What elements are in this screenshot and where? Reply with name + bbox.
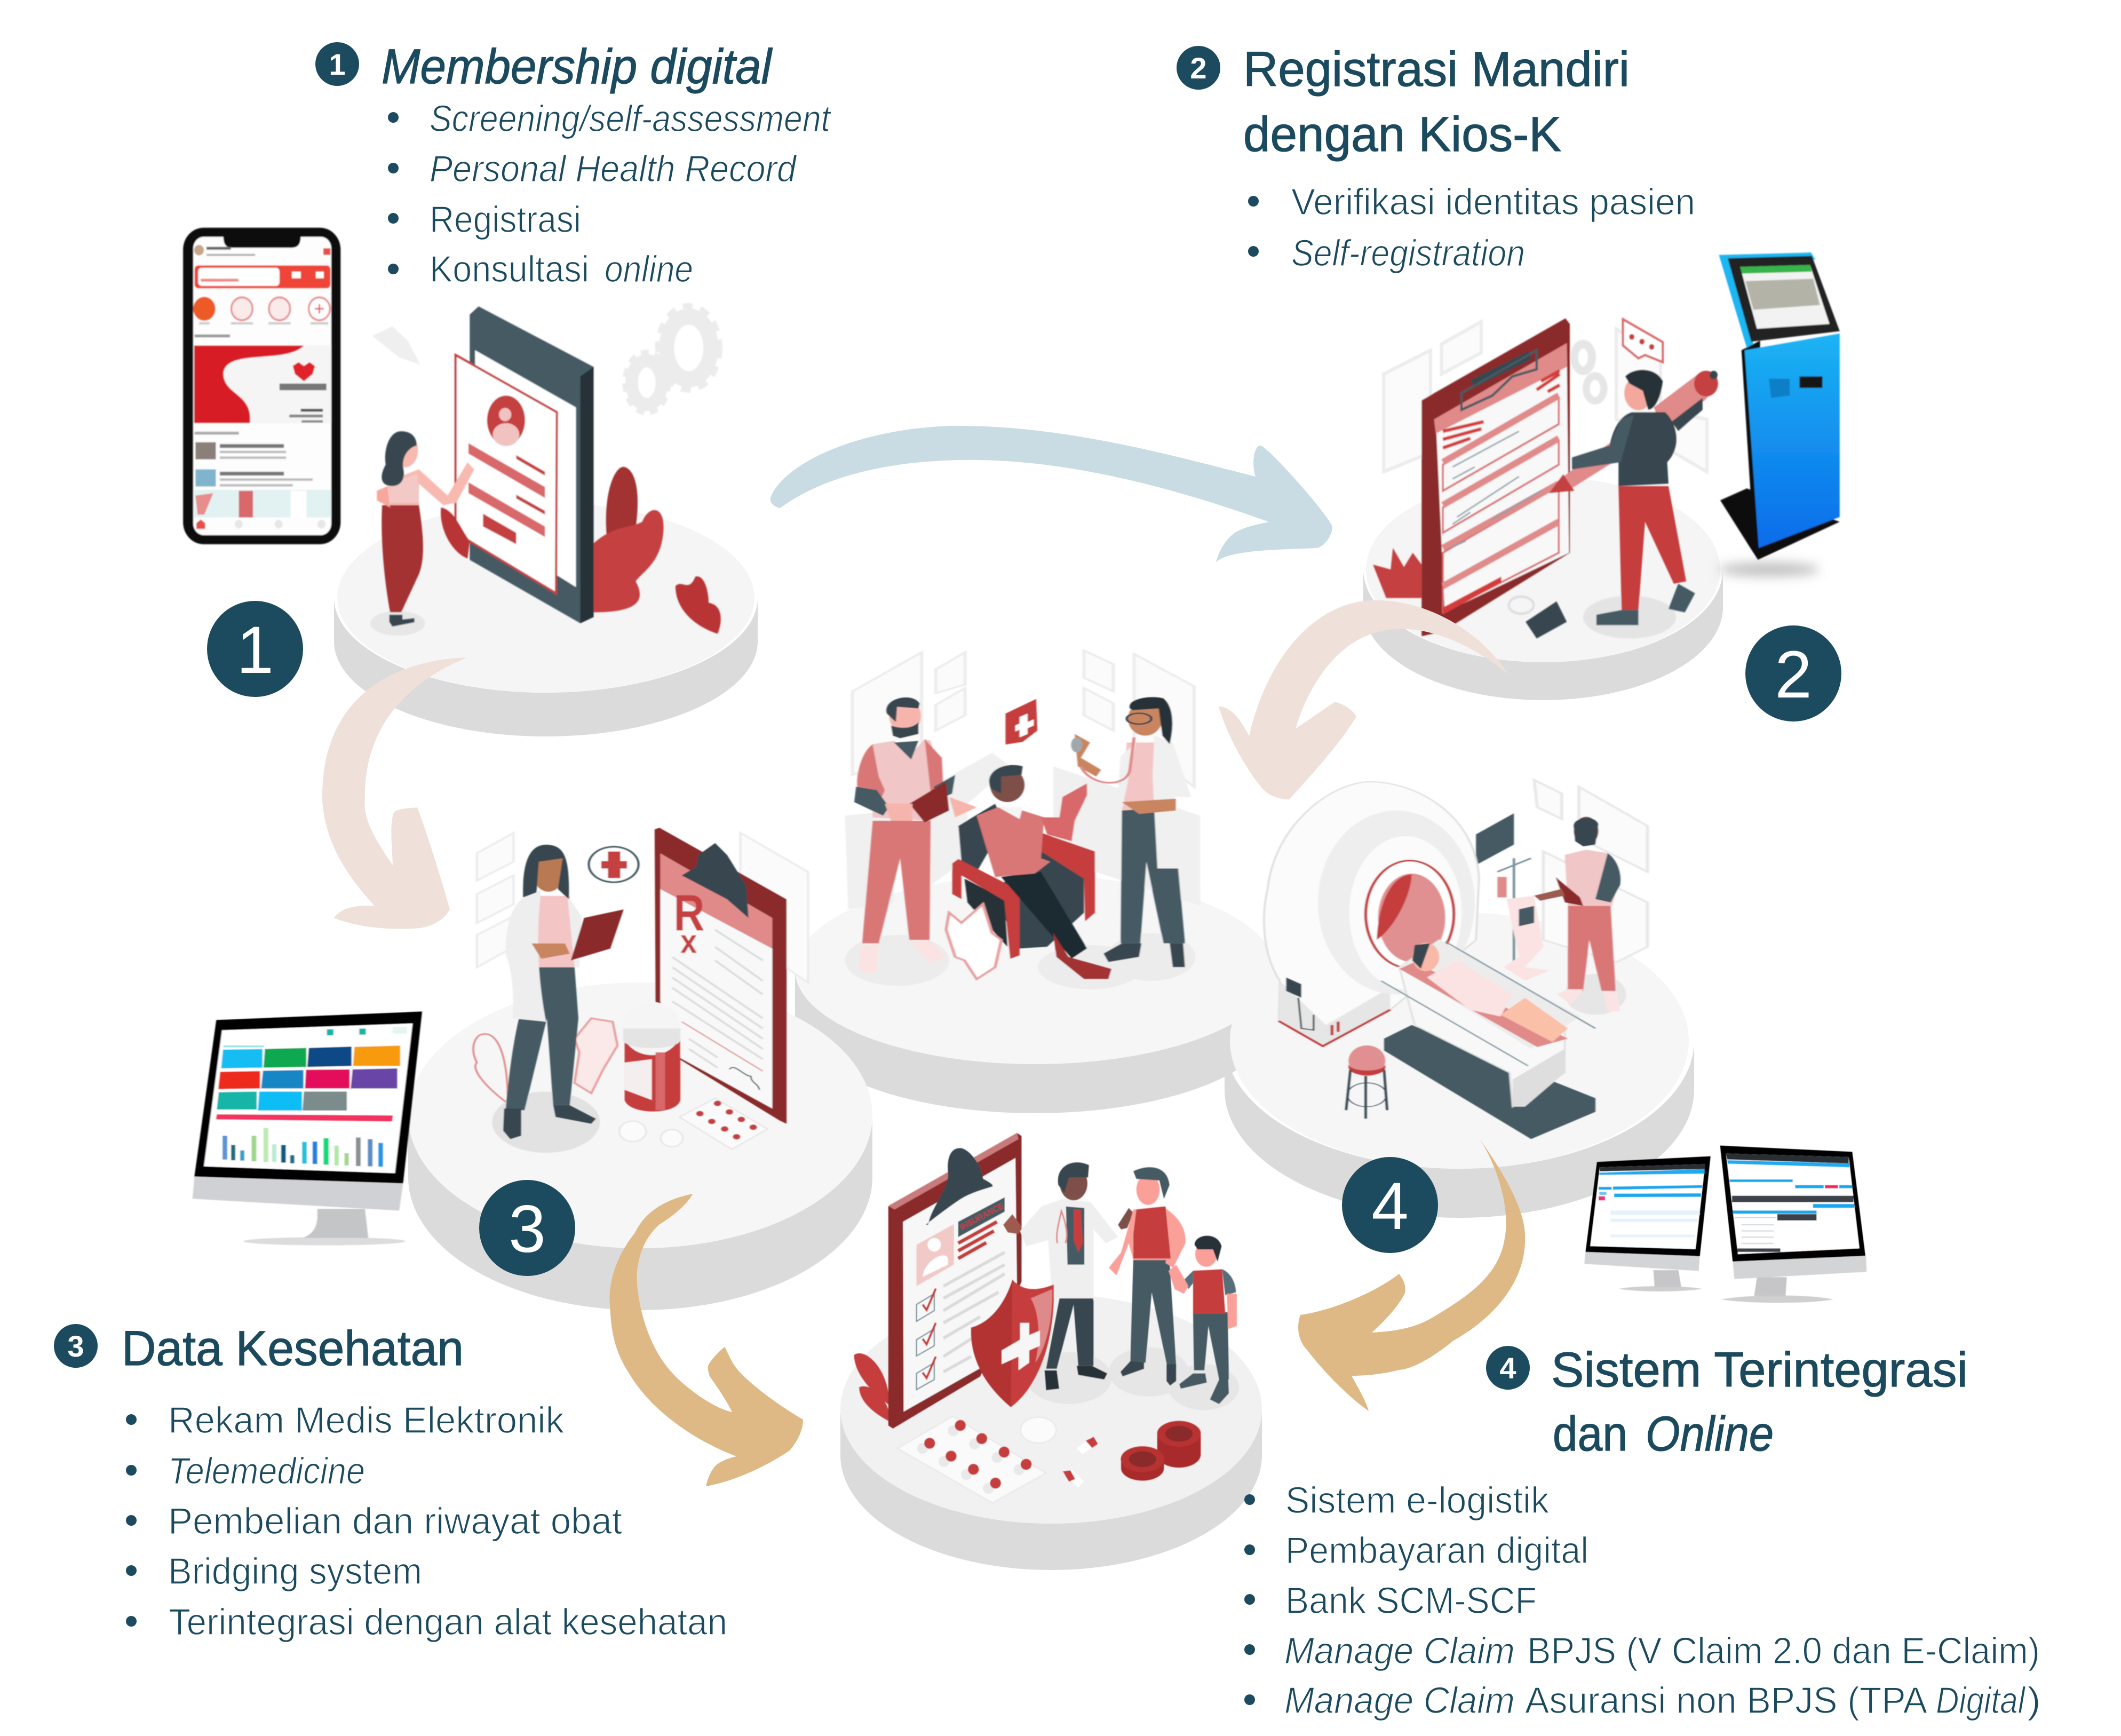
icon: tall leaf	[606, 467, 638, 538]
right monitor	[1720, 1146, 1866, 1303]
background frames	[1534, 780, 1648, 962]
bed table	[1381, 940, 1595, 1107]
icon: red plant	[854, 1353, 892, 1422]
illustration 3: doctor with prescription	[473, 828, 808, 1153]
person: doctor	[492, 845, 600, 1153]
illustration 2: man with giant form and pencil	[1373, 252, 1840, 638]
platform: disk 2	[1363, 477, 1723, 700]
menu icons	[193, 297, 330, 337]
icon: shield	[971, 1279, 1054, 1407]
list 4: Manage Claim	[1284, 1679, 1515, 1721]
title badge 2	[1177, 46, 1220, 90]
arrow: step 3 to bottom	[610, 1194, 803, 1486]
platform: center disk	[795, 875, 1275, 1113]
platform: disk 6	[840, 1294, 1262, 1570]
phone screen	[193, 237, 331, 535]
icon: clipboard in hand	[571, 909, 624, 961]
icon: profile card	[456, 355, 557, 593]
arrow: step 1 to 3	[322, 657, 467, 929]
icon: small plant	[441, 508, 470, 558]
title 3: Data Kesehatan	[122, 1321, 464, 1376]
list 3: Telemedicine	[168, 1450, 365, 1492]
floor shadows	[1026, 1347, 1239, 1410]
title 2: Registrasi Mandiri	[1243, 42, 1630, 97]
person: doctor with stethoscope	[1071, 697, 1191, 967]
icon: prescription clipboard: R	[674, 884, 705, 941]
title 1: Membership digital	[382, 39, 773, 94]
list 4	[1244, 1479, 2041, 1721]
person: mother	[1109, 1167, 1186, 1386]
phone body	[183, 228, 340, 544]
bed base	[1384, 1025, 1595, 1139]
list 4: Pembayaran digital	[1285, 1529, 1588, 1571]
list 4: Asuransi non BPJS (TPA	[1525, 1679, 1927, 1721]
icon: prescription clipboard: x	[680, 923, 697, 960]
icon: speech bubble	[1623, 319, 1663, 362]
title 4: Online	[1646, 1407, 1774, 1461]
person: nurse	[854, 697, 976, 974]
list 2	[1248, 181, 1695, 274]
kiosk	[1718, 252, 1840, 576]
background documents	[477, 833, 808, 982]
arrow: step 2 to center	[1219, 600, 1508, 799]
platform: disk 1	[334, 503, 758, 736]
number badge 4	[1342, 1157, 1438, 1253]
bottom banner	[194, 490, 331, 518]
dashboard bar chart	[223, 1128, 383, 1167]
icon: plant	[1373, 548, 1421, 598]
text block 4: Sistem Terintegrasi	[1244, 1343, 2041, 1721]
icon: small leaf	[676, 576, 721, 634]
monitor frame	[194, 1011, 422, 1184]
icon: binder clip	[1509, 597, 1567, 638]
icon: pills	[619, 1121, 683, 1147]
title badge 3	[54, 1324, 98, 1368]
number badge 1: 1	[236, 613, 274, 687]
title badge 4	[1486, 1346, 1530, 1390]
monitor: dashboard	[193, 1011, 422, 1246]
monitor base	[243, 1209, 406, 1246]
icon: star of life	[575, 1018, 617, 1093]
person: male nurse	[1534, 817, 1626, 1015]
monitors: hospital information system	[1584, 1146, 1866, 1303]
list 1: online	[605, 248, 693, 290]
title 4	[1551, 1343, 1968, 1461]
icon: gears	[625, 306, 720, 413]
monitor screen	[204, 1024, 412, 1173]
list 4: )	[2027, 1679, 2041, 1721]
list 1: Registrasi	[430, 199, 581, 240]
arrow: step 1 to 2	[770, 426, 1332, 562]
title badge 1: 1	[329, 47, 346, 81]
illustration 6: doctor and family with insurance	[854, 1133, 1239, 1503]
title badge 1	[315, 42, 359, 86]
title 4: dan	[1553, 1407, 1627, 1461]
illustration 5: consultation scene	[845, 651, 1201, 989]
icon: medicine bottle	[622, 1002, 681, 1112]
nav bar	[196, 519, 325, 529]
list 3: Terintegrasi dengan alat kesehatan	[169, 1601, 727, 1643]
icon: coins	[1121, 1421, 1201, 1480]
notch	[224, 236, 301, 248]
icon: giant clipboard form	[1421, 318, 1570, 636]
header row	[194, 245, 330, 256]
icon: phone device	[470, 306, 594, 623]
news list	[195, 432, 313, 487]
list 1: Konsultasi	[430, 248, 589, 290]
list 1: Screening/self-assessment	[430, 98, 831, 139]
phone mockup: member app screenshot	[183, 228, 340, 544]
icon: blister pack	[897, 1416, 1046, 1503]
icon: outline plant	[473, 1034, 508, 1104]
icon: blister pack	[679, 1098, 767, 1150]
text block 2: Registrasi Mandiri	[1177, 42, 1695, 274]
icon: clipboard: INSURANCE	[958, 1201, 1006, 1232]
text block 3: Data Kesehatan	[54, 1321, 727, 1643]
list 2: Self-registration	[1291, 232, 1525, 274]
list 4: BPJS (V Claim 2.0 dan E-Claim)	[1527, 1630, 2040, 1671]
illustration 1: woman with giant phone profile	[370, 306, 721, 636]
floor shadows	[845, 933, 1195, 989]
list 3: Rekam Medis Elektronik	[168, 1399, 565, 1441]
stool	[1346, 1045, 1387, 1119]
number badge 3: 3	[509, 1192, 546, 1266]
text block 1: Membership digital	[315, 39, 831, 290]
MRI machine	[1264, 782, 1479, 1046]
title badge 2: 2	[1190, 51, 1207, 85]
list 1: Personal Health Record	[430, 148, 797, 189]
list 4: Digital	[1936, 1679, 2026, 1721]
person: boy	[1169, 1236, 1237, 1404]
left monitor	[1584, 1156, 1711, 1291]
icon: medical cross box	[1005, 699, 1037, 744]
dashboard header	[224, 1027, 407, 1047]
list 4: Sistem e-logistik	[1285, 1479, 1550, 1521]
icon: gears	[1574, 344, 1604, 401]
pink header bar	[216, 1114, 393, 1121]
person: woman	[370, 431, 474, 636]
list 3: Pembelian dan riwayat obat	[168, 1500, 622, 1542]
illustration 4: MRI scanner scene	[1264, 780, 1648, 1139]
member card	[194, 345, 331, 423]
icon: star of life	[946, 904, 1001, 979]
list 4: Manage Claim	[1284, 1630, 1515, 1671]
patient lying down	[1400, 942, 1568, 1047]
monitor chin	[193, 1177, 403, 1211]
icon: medical bubble	[589, 847, 638, 882]
background frames	[1384, 322, 1707, 472]
number badge 4: 4	[1371, 1169, 1409, 1243]
person: doctor	[1003, 1162, 1133, 1390]
number badge 1	[207, 601, 303, 697]
icon: tablet and capsules	[1021, 1417, 1098, 1488]
title badge 3: 3	[67, 1329, 84, 1363]
icon: prescription clipboard	[655, 828, 787, 1124]
icon: cloud	[372, 327, 420, 364]
list 3	[126, 1399, 727, 1643]
title 2	[1243, 42, 1630, 162]
icon: red leaf	[594, 510, 664, 612]
title badge 4: 4	[1499, 1351, 1516, 1385]
person: man with pencil	[1549, 370, 1718, 638]
arrow: step 4 to bottom	[1298, 1138, 1525, 1411]
platform: disk 3	[408, 982, 872, 1310]
background cabinets	[845, 752, 1201, 909]
IV stand and dialysis machine	[1497, 858, 1550, 981]
number badge 2	[1745, 625, 1841, 722]
title 2: dengan Kios-K	[1243, 107, 1561, 162]
platform: disk 4	[1225, 913, 1694, 1218]
background frames	[852, 651, 1194, 787]
list 3: Bridging system	[168, 1550, 422, 1592]
icon: clipboard	[888, 1133, 1021, 1429]
monitor on wall	[1476, 813, 1514, 865]
list 1	[388, 98, 831, 290]
number badge 2: 2	[1775, 638, 1812, 712]
list 4: Bank SCM-SCF	[1285, 1580, 1537, 1621]
person: patient in armchair	[952, 765, 1111, 979]
dashboard tiles	[217, 1045, 400, 1111]
title 4: Sistem Terintegrasi	[1551, 1343, 1968, 1397]
number badge 3	[479, 1180, 575, 1276]
list 2: Verifikasi identitas pasien	[1291, 181, 1695, 223]
red member bar	[195, 265, 330, 288]
